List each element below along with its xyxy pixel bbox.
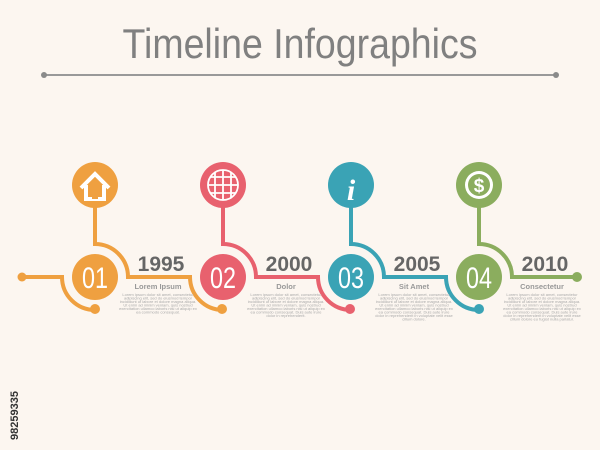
text block 1995: adipiscing elit, sed do eiusmod tempor [124, 296, 193, 300]
number 02 [200, 254, 246, 300]
text block 2005: Ut enim ad minim veniam, quis nostrud [379, 302, 449, 308]
text block 1995: exercitation ullamco laboris nisi ut aliquip ex [119, 306, 197, 311]
text block 2000: Ut enim ad minim veniam, quis nostrud [251, 302, 321, 308]
text block 2010: Lorem ipsum dolor sit amet, consectetur [506, 292, 578, 297]
text block 2005: ea commodo consequat. Duis aute irure [379, 310, 450, 314]
text block 1995: incididunt ut labore et dolore magna aliqua. [120, 299, 196, 304]
text block 1995: ea commodo consequat. [136, 310, 180, 314]
number 04 [456, 254, 502, 300]
text block 2000: ea commodo consequat. Duis aute irure [251, 310, 322, 314]
text block 1995: Lorem ipsum dolor sit amet, consectetur [122, 292, 194, 297]
icon: home [72, 162, 118, 208]
text block 1995: Ut enim ad minim veniam, quis nostrud [123, 302, 193, 308]
stock id text: 98259335 [9, 391, 21, 440]
text block 2005: adipiscing elit, sed do eiusmod tempor [380, 296, 449, 300]
timeline step 2 (pink) [200, 162, 355, 314]
text block 2010: 2010 [522, 253, 568, 276]
timeline step 3 (teal): i [347, 174, 356, 207]
number 03 [328, 254, 374, 300]
text block 2000: 2000 [266, 253, 312, 276]
text block 2010: ea commodo consequat. Duis aute irure [507, 310, 578, 314]
timeline step 4 (green) [456, 162, 582, 300]
timeline step 3 (teal): 03 [338, 262, 364, 295]
text block 2005 [375, 253, 453, 322]
timeline step 1 (orange) [18, 162, 227, 314]
text block 2010: exercitation ullamco laboris nisi ut aliquip ex [503, 306, 581, 311]
icon: info [328, 162, 374, 208]
number 01 [72, 254, 118, 300]
text block 2005: Sit Amet [399, 282, 430, 291]
text block 2010: Ut enim ad minim veniam, quis nostrud [507, 302, 577, 308]
text block 2000: adipiscing elit, sed do eiusmod tempor [252, 296, 321, 300]
text block 2010: incididunt ut labore et dolore magna aliqua. [504, 299, 580, 304]
text block 2000: incididunt ut labore et dolore magna aliqua. [248, 299, 324, 304]
text block 2010 [503, 253, 581, 322]
text block 2010: Consectetur [520, 282, 564, 291]
timeline step 4 (green): 04 [466, 262, 492, 295]
text block 2005: exercitation ullamco laboris nisi ut aliquip ex [375, 306, 453, 311]
text block 2010: dolor in reprehenderit in voluptate velit esse [503, 313, 581, 318]
text block 2005: Lorem ipsum dolor sit amet, consectetur [378, 292, 450, 297]
text block 2005: incididunt ut labore et dolore magna aliqua. [376, 299, 452, 304]
icon: dollar [456, 162, 502, 208]
timeline step 2 (pink): 02 [210, 262, 236, 295]
text block 2000: exercitation ullamco laboris nisi ut aliquip ex [247, 306, 325, 311]
icon: globe [200, 162, 246, 208]
text block 2010: adipiscing elit, sed do eiusmod tempor [508, 296, 577, 300]
title: Timeline Infographics [122, 20, 478, 67]
text block 2005: cillum dolore. [402, 316, 426, 322]
text block 2000: Dolor [276, 282, 296, 291]
text block 2010: cillum dolore eu fugiat nulla pariatur. [510, 316, 574, 322]
text block 2005: dolor in reprehenderit in voluptate velit esse [375, 313, 453, 318]
text block 2005: 2005 [394, 253, 441, 276]
timeline step 4 (green): $ [474, 176, 485, 197]
timeline step 1 (orange): 01 [82, 262, 108, 295]
text block 2000: Lorem ipsum dolor sit amet, consectetur [250, 292, 322, 297]
title underline [41, 72, 559, 78]
text block 1995: 1995 [138, 253, 185, 276]
text block 1995: Lorem Ipsum [134, 282, 182, 291]
text block 2000: dolor in reprehenderit. [266, 313, 306, 318]
text block 1995 [119, 253, 197, 314]
timeline step 3 (teal) [328, 162, 484, 314]
text block 2000 [247, 253, 325, 318]
